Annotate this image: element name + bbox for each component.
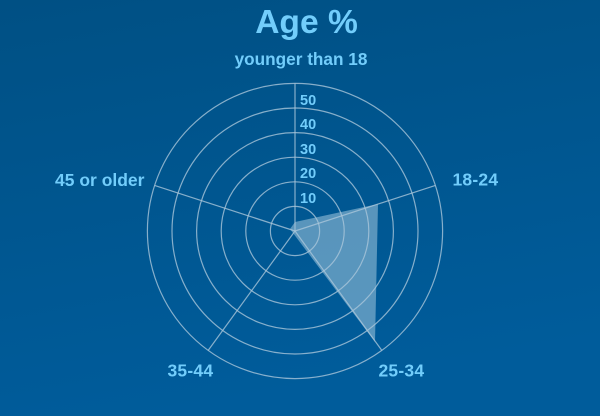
subtitle: younger than 18 <box>235 49 368 69</box>
scale labels: 50 <box>300 93 316 109</box>
data area: younger than 18 <box>290 204 378 342</box>
scale labels: 10 <box>300 191 316 207</box>
category label: 45 or older: 45 or older <box>55 170 145 190</box>
scale labels <box>300 93 316 207</box>
scale labels: 20 <box>300 166 316 182</box>
category label: 25-34: 25-34 <box>378 360 424 380</box>
category label: 18-24: 18-24 <box>452 170 498 190</box>
category label: 35-44: 35-44 <box>168 360 213 380</box>
scale labels: 40 <box>300 117 316 133</box>
radar grid <box>147 83 443 379</box>
title: Age % <box>255 4 358 41</box>
scale labels: 30 <box>300 142 316 158</box>
